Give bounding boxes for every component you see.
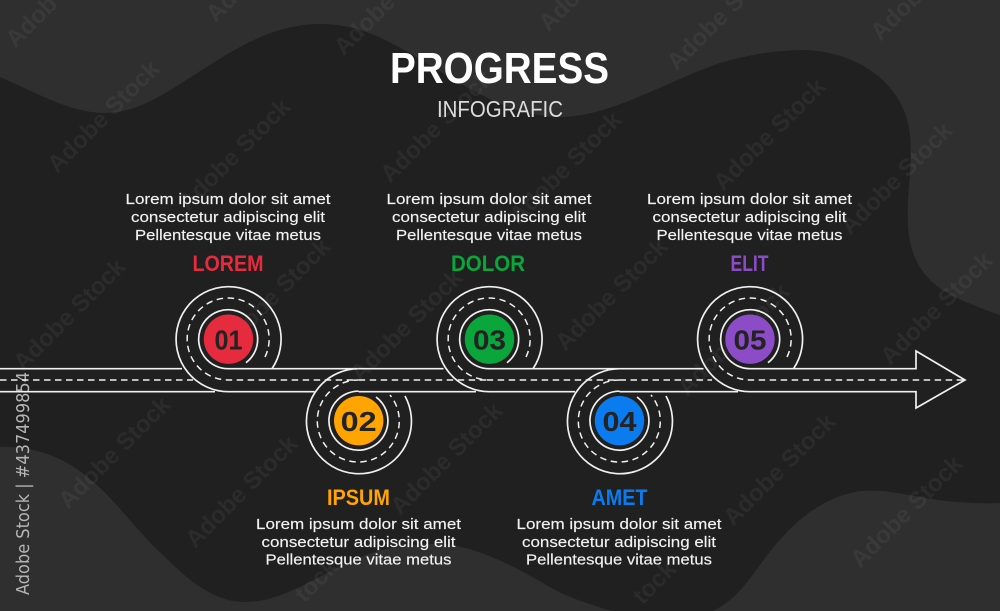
watermark pattern: Adobe Stock — [180, 430, 304, 553]
description text: consectetur adipiscing elit — [522, 534, 717, 551]
inner ring — [329, 391, 388, 450]
description text: Pellentesque vitae metus — [396, 227, 582, 244]
number badge: 04 — [602, 406, 637, 437]
step 3: dolor — [386, 191, 592, 369]
description text: Lorem ipsum dolor sit amet — [647, 191, 853, 208]
number badge: 02 — [341, 406, 377, 437]
watermark pattern: Adobe Stock — [718, 408, 842, 531]
description text: Lorem ipsum dolor sit amet — [126, 191, 331, 208]
description text: consectetur adipiscing elit — [262, 534, 456, 551]
number badge — [725, 314, 775, 364]
number badge — [204, 314, 253, 364]
watermark pattern: Adobe Stock — [375, 65, 499, 188]
number badge: 03 — [473, 324, 506, 356]
description text — [256, 516, 462, 568]
watermark pattern: Adobe Stock — [53, 391, 177, 514]
step 1: lorem — [126, 191, 331, 369]
watermark pattern: tock — [628, 555, 682, 610]
watermark pattern: Adobe Stock — [345, 264, 469, 387]
watermark pattern: Adobe Stock — [504, 106, 628, 229]
number badge: 05 — [734, 324, 766, 356]
watermark pattern: Adobe Stock — [550, 233, 674, 356]
label: IPSUM — [327, 485, 390, 510]
step 5: elit — [647, 191, 853, 369]
number badge: 01 — [214, 324, 242, 356]
description text — [386, 191, 592, 244]
background blob: bottom — [0, 447, 612, 611]
number badge — [595, 396, 644, 445]
background blob: bottom right — [713, 491, 1000, 611]
watermark pattern: Adobe Stock — [8, 253, 132, 376]
watermark pattern: Adobe Stock — [835, 117, 959, 240]
description text: Lorem ipsum dolor sit amet — [516, 516, 722, 533]
description text — [516, 516, 722, 568]
winding road with arrow — [0, 287, 965, 474]
watermark pattern: Adobe Stock — [213, 233, 337, 356]
subtitle: INFOGRAFIC — [437, 96, 563, 122]
watermark pattern: Adobe Stock — [42, 55, 166, 178]
watermark pattern: Adobe Stock — [875, 247, 999, 370]
road edge lines — [0, 368, 182, 370]
label: DOLOR — [451, 251, 525, 276]
inner ring — [721, 310, 780, 369]
inner ring — [199, 310, 258, 369]
inner ring — [460, 310, 519, 369]
step 2: ipsum — [256, 391, 462, 568]
watermark pattern: Adobe Stock — [708, 73, 832, 196]
description text: consectetur adipiscing elit — [652, 209, 847, 226]
label: AMET — [592, 485, 648, 510]
label: ELIT — [730, 251, 769, 276]
description text: Lorem ipsum dolor sit amet — [256, 516, 462, 533]
description text: Pellentesque vitae metus — [266, 552, 452, 568]
description text — [647, 191, 853, 244]
number badge — [465, 314, 514, 364]
background blob: top and right — [0, 0, 1000, 315]
watermark pattern: Adobe Stock — [385, 397, 509, 520]
watermark pattern: Adobe Stock — [672, 278, 796, 401]
watermark pattern: Adobe Stock — [845, 450, 969, 573]
label: LOREM — [192, 251, 264, 276]
description text: consectetur adipiscing elit — [131, 209, 326, 226]
description text: consectetur adipiscing elit — [392, 209, 587, 226]
number badge — [334, 396, 383, 445]
inner ring — [590, 391, 649, 450]
description text: Lorem ipsum dolor sit amet — [386, 191, 592, 208]
description text: Pellentesque vitae metus — [526, 552, 712, 568]
road centre dashes — [0, 379, 193, 381]
watermark pattern: Adobe Stock — [173, 93, 297, 216]
step 4: amet — [516, 391, 722, 568]
description text: Pellentesque vitae metus — [135, 227, 321, 244]
stock id side text: Adobe Stock | #437499854 — [13, 372, 34, 595]
description text — [126, 191, 331, 244]
title: PROGRESS — [390, 44, 609, 93]
description text: Pellentesque vitae metus — [656, 227, 842, 244]
watermark pattern: tock — [290, 553, 344, 608]
